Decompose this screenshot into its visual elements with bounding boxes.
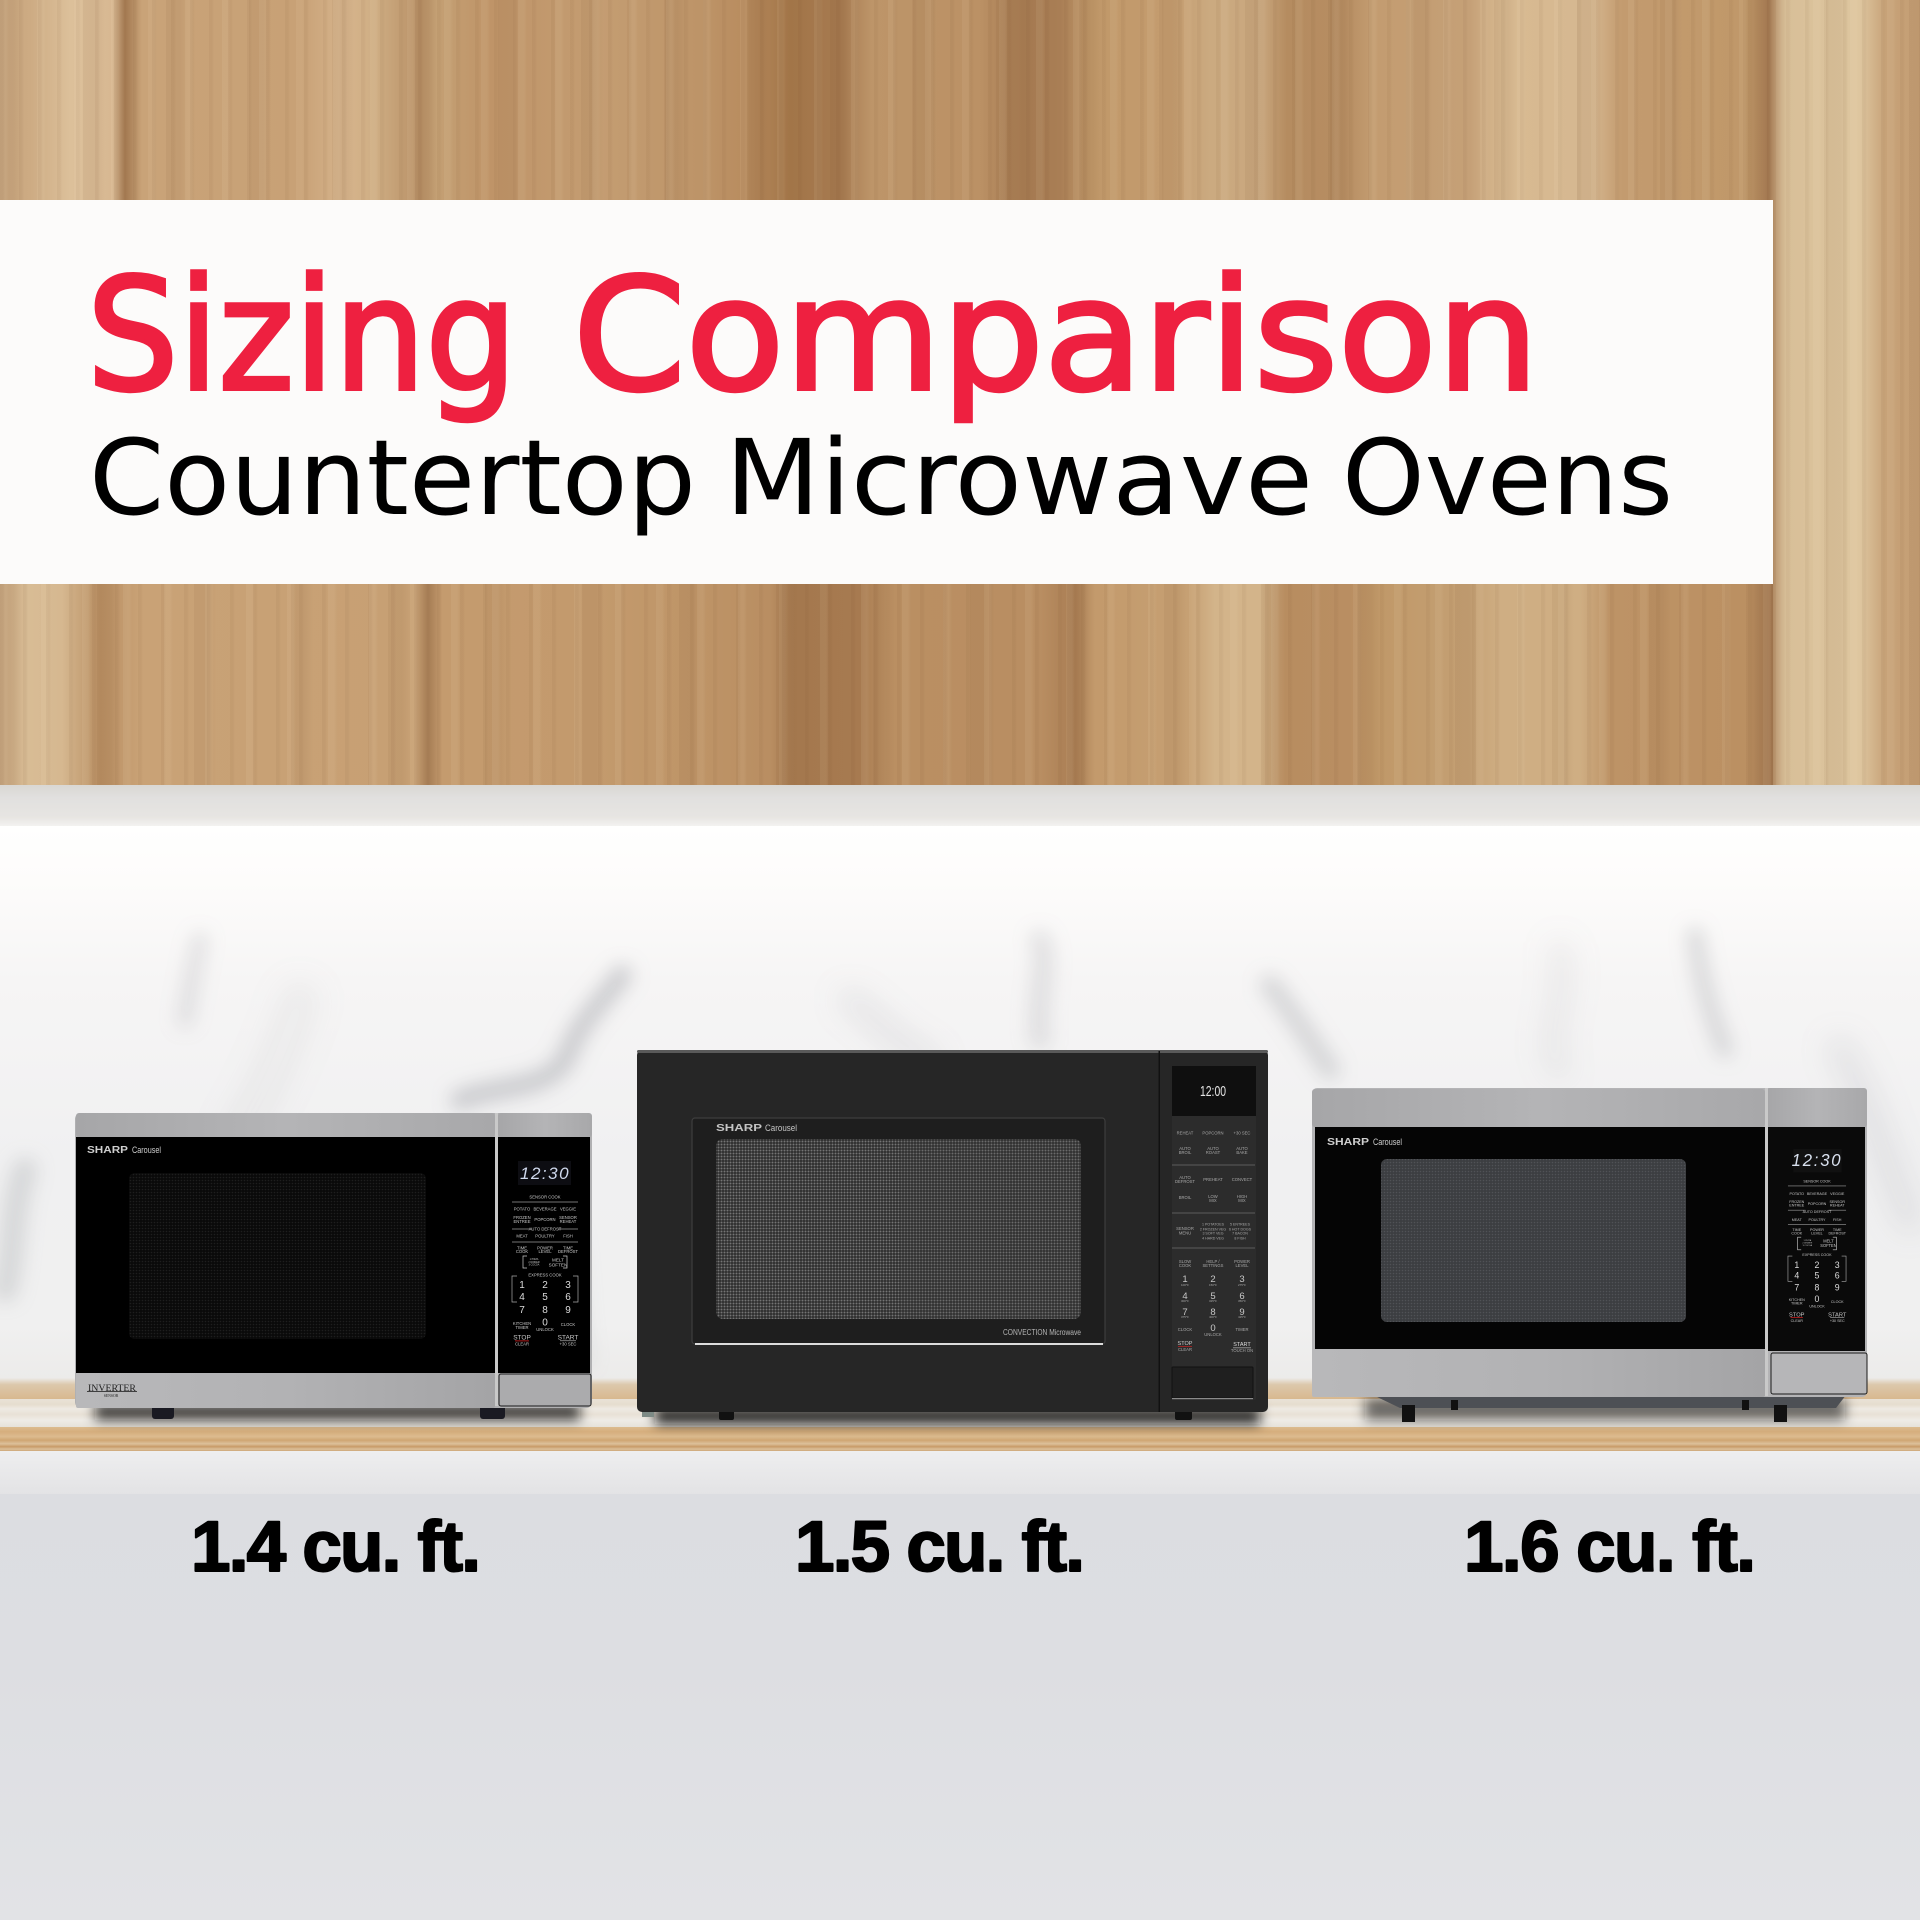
control panel: HIGH [1237,1194,1247,1199]
control panel: 1 PIZZA [1803,1239,1812,1242]
control panel: COOK [516,1249,528,1254]
control panel: 3 COCOA [1803,1244,1813,1247]
base and feet [1373,1395,1846,1422]
control panel: SOFTEN [549,1262,567,1268]
control panel: SENSOR [1176,1226,1194,1231]
wood wall panel upper [0,0,1920,785]
control panel: SETTINGS [1203,1263,1224,1268]
counter ledge [0,1451,1920,1494]
control panel: STOP [1178,1341,1193,1347]
control panel: 1 [1182,1274,1188,1285]
control panel [1172,1066,1256,1400]
door window [129,1173,426,1339]
control panel: +30 SEC [1234,1130,1250,1136]
control panel: UNLOCK [1204,1332,1222,1337]
control panel: 6 [565,1292,571,1303]
control panel: 3 [565,1280,571,1291]
control panel: TIMER [1235,1327,1249,1332]
control panel: 275°F [1238,1283,1246,1287]
control panel: POWER [537,1246,553,1250]
control panel: CLOCK [1831,1300,1844,1304]
heading: Sizing Comparison: Comparison [573,245,1539,426]
control panel: MIX [1238,1198,1246,1203]
control panel: POTATO [514,1206,531,1212]
control panel: 4 HARD VEG [1202,1236,1224,1240]
brand mark [716,1122,797,1134]
control panel: 9 [1835,1282,1840,1292]
control panel: 4 [1182,1291,1188,1302]
control panel: PREHEAT [1203,1177,1223,1182]
lower wall [0,1494,1920,1920]
control panel: POWER [1234,1259,1250,1264]
door window [716,1139,1081,1319]
inverter logo: SENSOR [104,1394,119,1398]
control panel [1788,1149,1847,1323]
feet [152,1405,505,1419]
control panel: LEVEL [1811,1231,1823,1236]
control panel: UNLOCK [1809,1304,1825,1308]
control panel: 4 [519,1292,525,1303]
countertop wood edge [0,1427,1920,1451]
control panel: LEVEL [538,1249,552,1254]
control panel: CLEAR [1178,1347,1192,1352]
control panel: AUTO [1179,1146,1192,1151]
brand mark: SHARP [716,1122,762,1134]
control panel: 1 PIZZA [530,1258,539,1261]
control panel: SLOW [1179,1259,1191,1264]
subheading: Countertop Microwave Ovens: Countertop [89,417,696,539]
control panel: 8 FISH [1234,1236,1246,1240]
subheading: Countertop Microwave Ovens: Microwave [725,417,1313,539]
capacity labels [191,1508,1756,1587]
control panel: CLOCK [561,1322,575,1327]
control panel: 6 [1239,1291,1245,1302]
control panel: COOK [1791,1231,1803,1236]
control panel: ENTREE [514,1219,531,1224]
control panel: TIMER [1791,1302,1803,1306]
control panel: MELT [552,1258,564,1262]
control panel: FISH [1833,1218,1842,1222]
control panel: MENU [1179,1230,1191,1236]
control panel: 7 BACON [1232,1232,1248,1236]
control panel: VEGGIE [1830,1192,1845,1196]
control panel: 1 [1794,1260,1799,1270]
clock display [1172,1066,1256,1116]
control panel: 8 [542,1305,548,1316]
control panel [512,1161,578,1346]
wood counter back edge [0,1378,1920,1400]
control panel: SENSOR [1829,1200,1845,1204]
control panel: STOP [513,1334,531,1342]
control panel: TIME [1833,1228,1842,1232]
door window [1381,1159,1686,1322]
heading: Sizing Comparison: Sizing [87,245,517,426]
clock display: 12:00 [1200,1083,1226,1100]
control panel: 100°F [1181,1283,1189,1287]
shadows under microwaves [95,1398,1845,1424]
control panel: 1 POTATOES [1202,1222,1225,1226]
control panel: REHEAT [1177,1130,1194,1136]
control panel: 3 COCOA [529,1264,540,1267]
brand mark: Carousel [765,1123,797,1133]
control panel: START [1233,1342,1251,1348]
control panel: 325°F [1209,1299,1217,1303]
control panel: BEVERAGE [1807,1192,1828,1196]
control panel: +30 SEC [1830,1319,1845,1323]
control panel: AUTO DEFROST [529,1226,562,1232]
clock display: 12:30 [1792,1151,1842,1170]
control panel: 2 FROZEN VEG [1200,1228,1226,1232]
control panel: UNLOCK [536,1327,554,1332]
control panel: 2 DINNER [528,1261,540,1264]
control panel: 5 ENTREES [1230,1222,1251,1226]
control panel: SOFTEN [1820,1243,1837,1248]
brand mark: Carousel [132,1145,161,1155]
control panel: 2 [1815,1260,1819,1270]
brand mark [87,1145,161,1156]
control panel: MELT [1823,1239,1834,1244]
control panel: 2 DINNER [1802,1242,1813,1245]
control panel: MEAT [1792,1218,1802,1222]
control panel: POPCORN [534,1217,556,1222]
control panel: SENSOR COOK [529,1194,561,1200]
control panel: 5 [1815,1271,1819,1281]
microwave: 1.6 cu. ft. stainless [1312,1088,1867,1422]
control panel: POTATO [1790,1192,1804,1196]
control panel: POULTRY [1808,1218,1826,1222]
control panel: KITCHEN [1789,1298,1805,1302]
subheading: Countertop Microwave Ovens: Ovens [1342,417,1673,539]
control panel: BEVERAGE [533,1206,557,1212]
control panel: 5 [1210,1291,1216,1302]
label: 1.6 cu. ft.: 1.6 cu. ft. [1464,1508,1756,1587]
control panel: FROZEN [1789,1200,1805,1204]
body [637,1050,1268,1412]
control panel: CLEAR [515,1342,529,1346]
control panel: BAKE [1236,1150,1248,1155]
control panel: POPCORN [1202,1130,1224,1136]
control panel: START [1828,1312,1847,1318]
control panel: BROIL [1179,1150,1192,1155]
control panel: REHEAT [1830,1204,1845,1208]
inverter logo: INVERTER [88,1384,137,1394]
control panel: POULTRY [535,1234,555,1238]
control panel: 300°F [1181,1299,1189,1303]
control panel: 425°F [1238,1315,1246,1319]
control panel: ROAST [1206,1150,1221,1155]
control panel: DEFROST [558,1249,578,1254]
control panel: COOK [1179,1263,1191,1268]
countertop shine [0,1399,1920,1427]
door [692,1118,1105,1344]
microwave: 1.4 cu. ft. stainless [75,1113,592,1419]
control panel: STOP [1789,1312,1805,1318]
microwave: 1.5 cu. ft. black convection [637,1050,1268,1420]
control panel: AUTO [1179,1175,1192,1180]
feet [642,1408,1192,1420]
label: 1.4 cu. ft.: 1.4 cu. ft. [191,1508,481,1587]
control panel: AUTO DEFROST [1803,1210,1832,1214]
body [1312,1088,1867,1397]
brand mark: SHARP [87,1145,128,1156]
control panel: 150°F [1209,1283,1217,1287]
control panel: +30 SEC [560,1342,576,1346]
door pocket [1771,1353,1867,1394]
control panel: 9 [565,1305,571,1316]
control panel: 7 [1794,1282,1799,1292]
control panel: SENSOR [559,1215,577,1220]
control panel: 400°F [1209,1315,1217,1319]
control panel: TOUCH ON [1231,1348,1253,1353]
title banner [0,200,1773,584]
control panel: TIME [563,1246,573,1250]
control panel: HELP / [1206,1259,1220,1264]
control panel: CLEAR [1791,1319,1803,1323]
control panel: REHEAT [560,1219,577,1224]
convection label: CONVECTION Microwave [1003,1328,1081,1337]
brand mark: Carousel [1373,1137,1402,1147]
control panel: SENSOR COOK [1803,1180,1831,1184]
body [75,1113,592,1408]
control panel: 6 [1835,1271,1840,1281]
control panel: BROIL [1179,1195,1192,1200]
control panel: 3 SOFT VEG [1202,1232,1224,1236]
control panel: MEAT [516,1234,528,1238]
control panel: DEFROST [1828,1231,1847,1236]
door pocket [1172,1367,1253,1398]
control panel: FROZEN [513,1215,531,1220]
control panel: LOW [1208,1194,1218,1199]
brand mark [1327,1136,1402,1148]
control panel: 2 [542,1280,548,1291]
label: 1.5 cu. ft.: 1.5 cu. ft. [795,1508,1085,1587]
control panel: EXPRESS COOK [528,1272,562,1278]
control panel: 0 [1210,1323,1216,1334]
control panel: POPCORN [1808,1202,1827,1206]
control panel: ENTREE [1789,1204,1805,1208]
control panel: 0 [542,1318,548,1328]
control panel: 1 [519,1280,525,1291]
control panel: FISH [563,1234,573,1238]
control panel: VEGGIE [560,1206,576,1212]
control panel: AUTO [1236,1146,1249,1151]
control panel: EXPRESS COOK [1802,1253,1832,1257]
control panel: 4 [1794,1271,1799,1281]
control panel: POWER [1810,1228,1824,1232]
control panel: CONVECT [1232,1177,1253,1182]
control panel: MIX [1209,1198,1217,1203]
door pocket [499,1374,591,1406]
control panel: DEFROST [1175,1179,1195,1184]
control panel: 7 [519,1305,525,1316]
inverter logo [87,1384,137,1398]
control panel: CLOCK [1178,1327,1192,1332]
control panel: 8 [1815,1282,1819,1292]
control panel: 8 [1210,1307,1216,1318]
clock display: 12:30 [520,1164,570,1183]
marble backsplash [0,826,1920,1380]
control panel: KITCHEN [513,1321,531,1326]
control panel: TIME [517,1246,527,1250]
control panel: 2 [1210,1274,1216,1285]
control panel: AUTO [1207,1146,1220,1151]
backsplash shelf band [0,785,1920,828]
control panel: TIMER [515,1325,529,1330]
control panel: 3 [1239,1274,1245,1285]
control panel: 3 [1835,1260,1840,1270]
control panel: 7 [1182,1307,1188,1318]
control panel: LEVEL [1235,1263,1249,1268]
control panel: 350°F [1238,1299,1246,1303]
control panel: START [558,1334,578,1342]
wood wall panel lower [0,392,1773,785]
control panel: TIME [1792,1228,1802,1232]
brand mark: SHARP [1327,1136,1369,1148]
control panel: 6 HOT DOGS [1229,1228,1252,1232]
control panel: 375°F [1181,1315,1189,1319]
control panel: 5 [542,1292,548,1303]
control panel: 9 [1239,1307,1245,1318]
control panel: 0 [1815,1294,1819,1304]
